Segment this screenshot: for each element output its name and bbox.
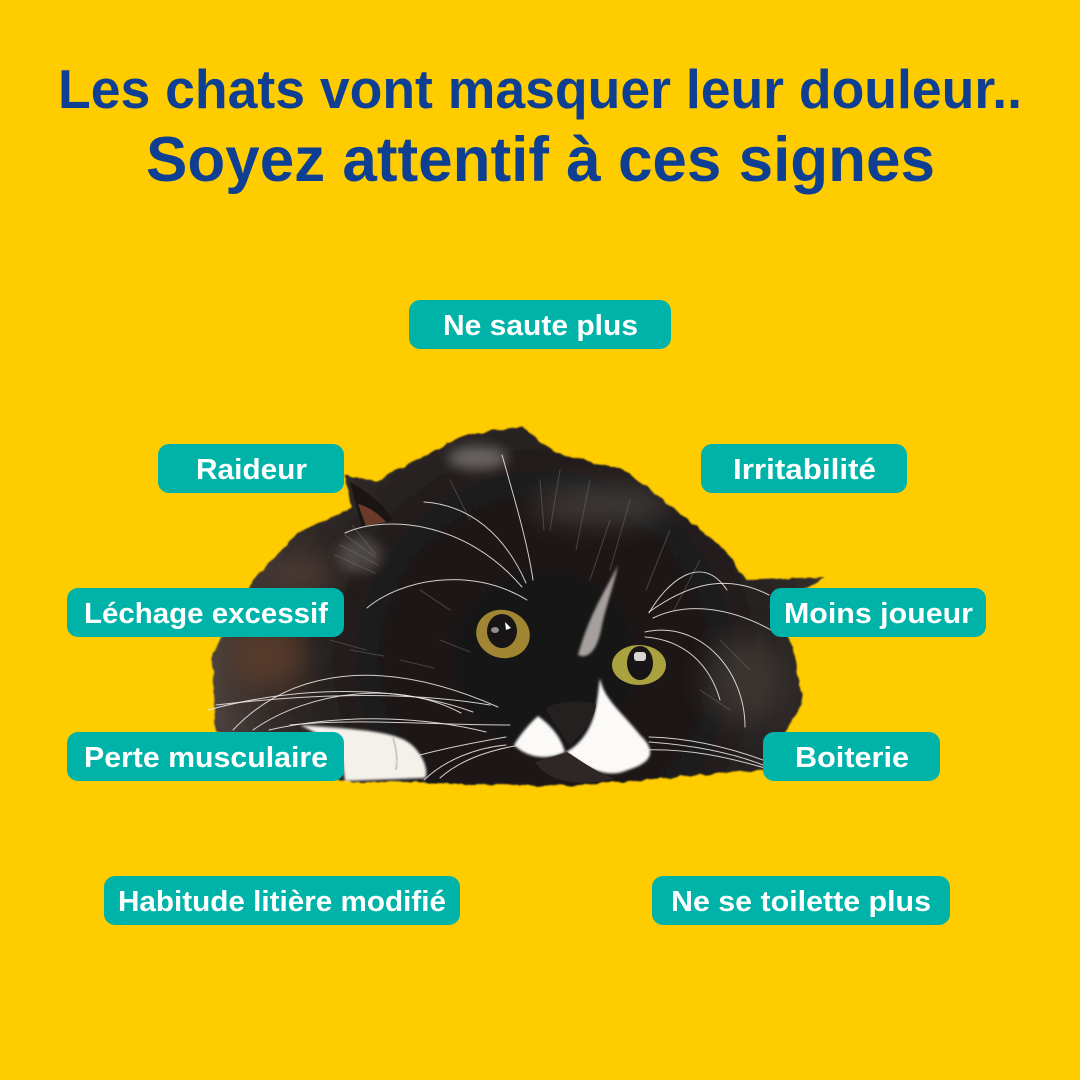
label: Ne saute plus <box>409 300 671 349</box>
title: Les chats vont masquer leur douleur.. <box>58 58 1022 120</box>
label: Boiterie: Boiterie <box>795 742 909 774</box>
label: Ne saute plus: Ne saute plus <box>443 310 638 342</box>
label: Raideur: Raideur <box>196 454 307 486</box>
label: Moins joueur: Moins joueur <box>784 598 973 630</box>
title <box>58 58 1022 195</box>
fur shading <box>230 446 785 725</box>
label: Perte musculaire <box>67 732 344 781</box>
cat photo illustration <box>208 427 824 786</box>
whiskers <box>208 455 771 780</box>
cat body silhouette <box>212 427 824 786</box>
label: Ne se toilette plus: Ne se toilette plus <box>671 886 931 918</box>
title: Soyez attentif à ces signes <box>146 125 935 195</box>
label: Léchage excessif: Léchage excessif <box>84 598 328 630</box>
white paw <box>300 725 426 781</box>
label: Ne se toilette plus <box>652 876 950 925</box>
label: Habitude litière modifié <box>104 876 460 925</box>
left ear inner <box>350 482 392 528</box>
left eye <box>471 604 535 664</box>
label: Irritabilité: Irritabilité <box>733 454 876 486</box>
nose <box>546 702 596 746</box>
label: Boiterie <box>763 732 940 781</box>
label: Moins joueur <box>770 588 986 637</box>
forehead white streak <box>578 565 618 656</box>
mouth <box>535 752 615 783</box>
label: Irritabilité <box>701 444 907 493</box>
label: Raideur <box>158 444 344 493</box>
right eye <box>612 645 666 685</box>
label: Léchage excessif <box>67 588 344 637</box>
white blaze and muzzle <box>566 678 650 773</box>
label: Habitude litière modifié: Habitude litière modifié <box>118 886 446 918</box>
label: Perte musculaire: Perte musculaire <box>84 742 328 774</box>
